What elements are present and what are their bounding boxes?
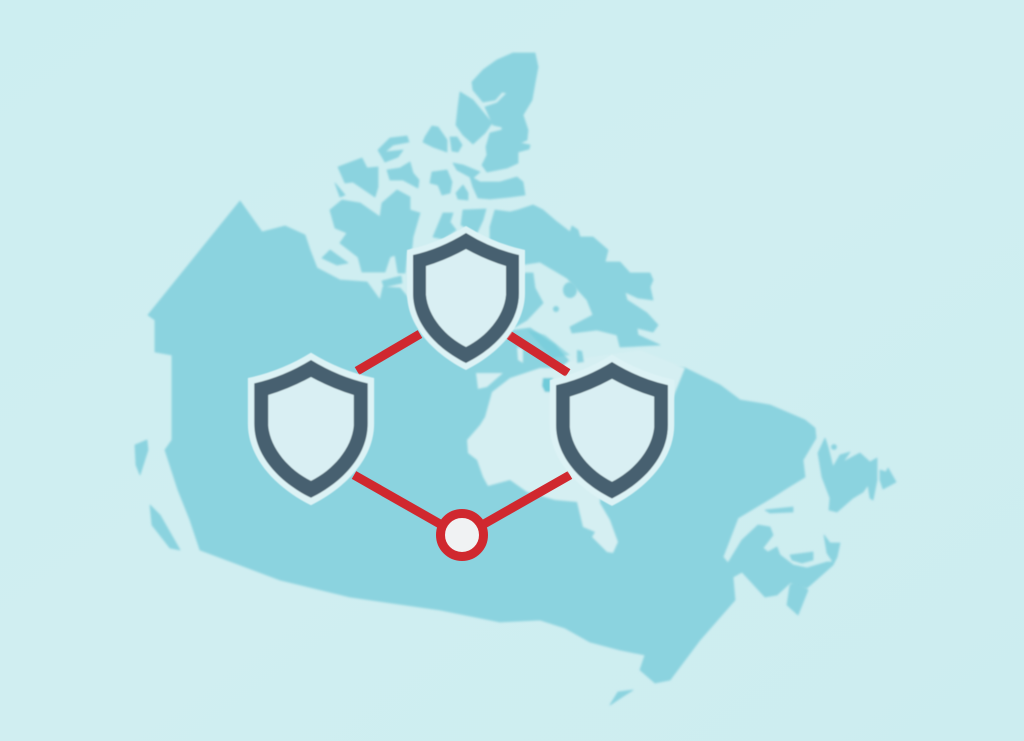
- Axel Heiberg Island: [456, 92, 492, 144]
- mainland: [148, 201, 840, 683]
- James Bay inlet: [476, 373, 503, 389]
- Hudson Bay islands: [542, 378, 553, 392]
- shield: top: [407, 226, 525, 370]
- Atlantic islands: [135, 438, 896, 705]
- arctic islands: [423, 126, 447, 152]
- Foxe Basin water features: [467, 282, 685, 553]
- red connector lines: [354, 334, 570, 524]
- map of Canada: [148, 53, 840, 683]
- Nova Scotia: [787, 583, 808, 615]
- turquoise wash: [527, 330, 570, 358]
- node circle: [440, 514, 484, 556]
- Hudson Bay: [467, 350, 685, 553]
- Ellesmere Island: [472, 53, 538, 172]
- Melville Peninsula: [505, 273, 543, 327]
- shield: right: [550, 355, 674, 506]
- southern tip: [610, 690, 633, 705]
- west coast islands: [135, 440, 148, 475]
- Newfoundland: [818, 438, 877, 512]
- shield: left: [248, 353, 374, 505]
- Baffin Island: [490, 205, 660, 347]
